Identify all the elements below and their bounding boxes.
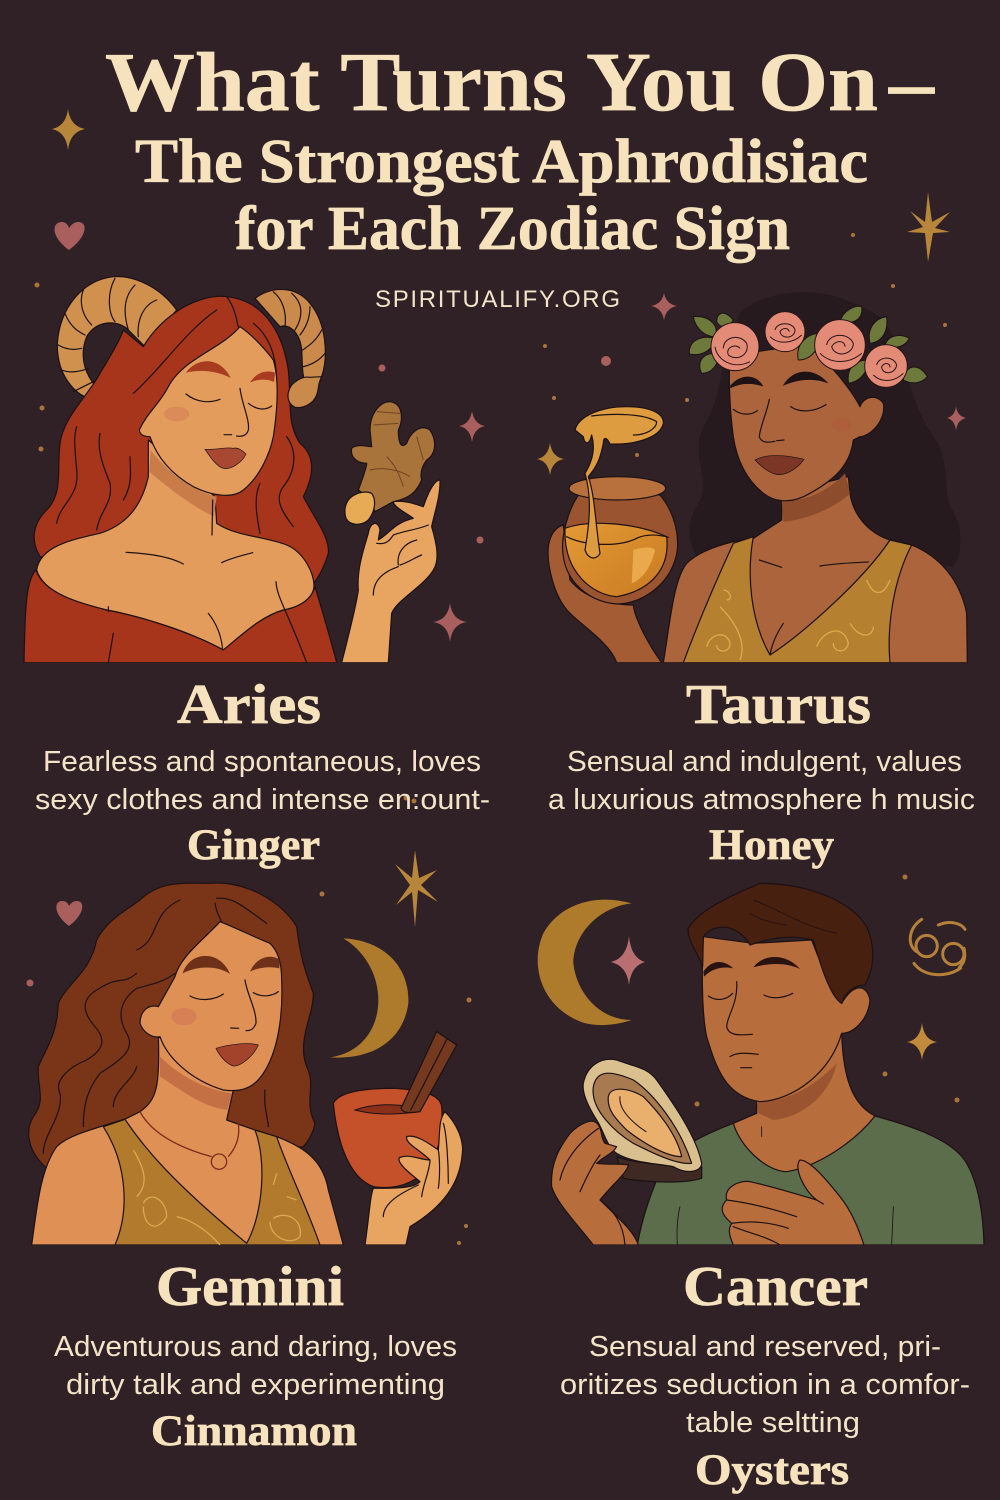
neck shadow	[160, 1057, 232, 1110]
flowing red hair	[34, 296, 328, 583]
neck shadow	[757, 1063, 837, 1120]
neck	[733, 1033, 875, 1172]
panel text: Taurus: Taurus	[686, 674, 871, 736]
panel text: Gemini: Cinnamon	[151, 1408, 357, 1455]
panel text: Aries: Ginger	[187, 822, 320, 869]
hand holding jar	[548, 525, 662, 663]
collarbone lines	[108, 500, 307, 663]
illustration: Taurus woman with rose crown holding honey jar	[548, 292, 967, 663]
right ram horn	[255, 289, 325, 385]
shirt seams	[677, 1127, 893, 1245]
decorative stars and hearts	[26, 109, 966, 1245]
gold dress	[103, 1119, 320, 1245]
hand	[342, 480, 440, 663]
shoulders and neck	[37, 440, 314, 650]
site url: SPIRITUALIFY.ORG	[375, 286, 620, 313]
right hand on chest	[722, 1160, 864, 1245]
gold dress	[683, 537, 912, 663]
ginger root	[345, 402, 435, 524]
panel text: Cancer: Sensual and reserved, pri-	[589, 1331, 941, 1363]
illustration: Cancer man holding oyster	[538, 883, 984, 1245]
face	[140, 922, 282, 1091]
panel text: Taurus: a luxurious atmosphere h music	[548, 784, 975, 816]
oyster	[583, 1059, 702, 1182]
shoulders and neck	[32, 1037, 343, 1245]
title	[105, 36, 935, 263]
panel text: Gemini: dirty talk and experimenting	[66, 1369, 445, 1401]
face	[702, 937, 870, 1102]
panel text: Gemini	[54, 1256, 457, 1455]
cinnamon bowl	[333, 1032, 457, 1188]
leaves of crown	[689, 306, 927, 383]
dark short hair	[688, 883, 873, 1003]
panel text: Aries: Aries	[177, 674, 321, 736]
hand	[365, 1112, 463, 1245]
cancer zodiac glyph	[910, 919, 965, 975]
green shirt	[637, 1116, 984, 1245]
panel text: Cancer: oritizes seduction in a comfor-	[560, 1369, 970, 1401]
honey jar	[563, 407, 678, 604]
roses of crown	[711, 312, 907, 387]
face	[729, 347, 884, 501]
panel text: Cancer: table seltting	[686, 1407, 860, 1439]
title: The Strongest Aphrodisiac	[135, 128, 868, 196]
illustration: Aries woman with ram horns holding ginger	[24, 277, 440, 663]
panel text: Aries: sexy clothes and intense en:ount-	[35, 784, 490, 816]
title: What Turns You On	[105, 36, 878, 129]
panel text: Aries	[35, 674, 490, 869]
title: for Each Zodiac Sign	[235, 195, 790, 263]
left hand	[551, 1121, 638, 1245]
panel text: Aries: Fearless and spontaneous, loves	[43, 746, 481, 778]
crescent moon	[330, 938, 408, 1058]
panel text: Taurus: Honey	[709, 822, 835, 869]
red dress	[24, 570, 337, 663]
neck shadow	[782, 473, 850, 522]
dark wavy hair	[690, 292, 960, 567]
panel text: Taurus	[548, 674, 975, 869]
curly brown hair	[29, 883, 315, 1168]
title: –	[888, 36, 935, 129]
panel text: Gemini: Adventurous and daring, loves	[54, 1331, 457, 1363]
panel text: Cancer: Oysters	[695, 1447, 849, 1494]
panel text: Cancer	[560, 1256, 970, 1494]
face	[139, 327, 277, 495]
illustration: Gemini woman holding cinnamon drink	[29, 883, 463, 1245]
panel text: Cancer: Cancer	[683, 1256, 868, 1318]
neck shadow	[149, 450, 217, 517]
crescent moon	[538, 900, 632, 1025]
shoulders and neck	[663, 477, 967, 663]
right horn curl	[288, 377, 322, 408]
necklace	[140, 1112, 239, 1169]
panel text: Gemini: Gemini	[156, 1256, 344, 1318]
left ram horn	[57, 277, 177, 401]
panel text: Taurus: Sensual and indulgent, values	[567, 746, 962, 778]
collarbone lines	[759, 560, 868, 655]
